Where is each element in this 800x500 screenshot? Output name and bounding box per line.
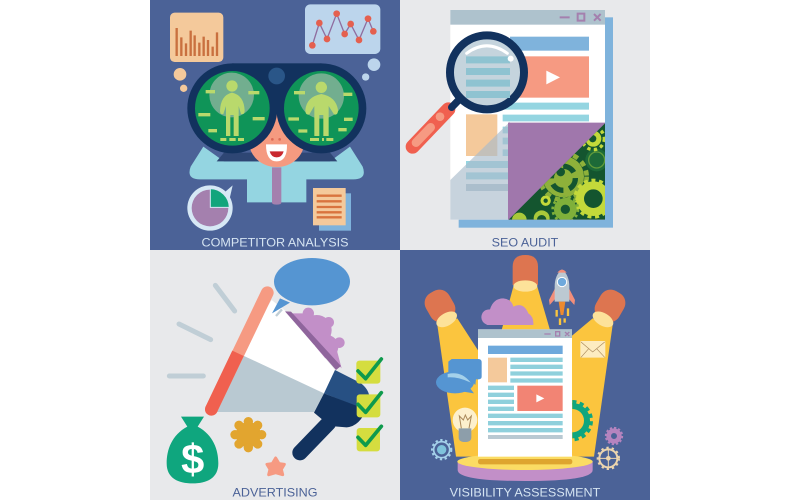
panel: competitor analysis (150, 0, 400, 250)
icon: orange gear (230, 417, 266, 452)
icon: purple gear (290, 308, 345, 368)
heading: VISIBILITY ASSESSMENT (450, 485, 601, 499)
panel: visibility assessment (400, 250, 650, 500)
heading: ADVERTISING (232, 485, 317, 499)
heading: SEO AUDIT (492, 235, 559, 249)
panel: seo audit (400, 0, 650, 250)
icon: envelope (580, 341, 605, 358)
icon: purple small gear (606, 428, 622, 444)
megaphone (205, 293, 369, 453)
icon: pie chart (187, 185, 233, 231)
icon: line chart bubble (305, 4, 380, 81)
icon: magnifying glass (413, 35, 524, 147)
icon: rocket (549, 269, 575, 325)
icon: light bulb (453, 408, 477, 442)
icon: cream gear (598, 448, 619, 469)
speech bubble (272, 258, 350, 316)
left lens (195, 71, 270, 146)
heading: COMPETITOR ANALYSIS (201, 235, 348, 249)
checkboxes (356, 359, 381, 451)
icon: bar chart bubble (170, 13, 223, 92)
icon: blue gear (432, 440, 451, 459)
icon: money bag: $ (181, 435, 204, 482)
sound lines (169, 285, 235, 376)
icon: cloud (481, 298, 533, 325)
icon: green gear (572, 402, 591, 439)
icon: document (313, 188, 351, 231)
icon: speech bubbles (436, 359, 482, 393)
binoculars (187, 63, 366, 153)
browser window (478, 329, 572, 464)
panel: advertising (150, 250, 400, 500)
right lens (284, 71, 359, 146)
icon: star (267, 458, 284, 475)
icon: money bag (167, 417, 218, 483)
person with shirt and tie (189, 113, 364, 205)
spotlights (420, 255, 630, 481)
browser window (450, 10, 613, 228)
folded corner with gears (508, 122, 605, 220)
